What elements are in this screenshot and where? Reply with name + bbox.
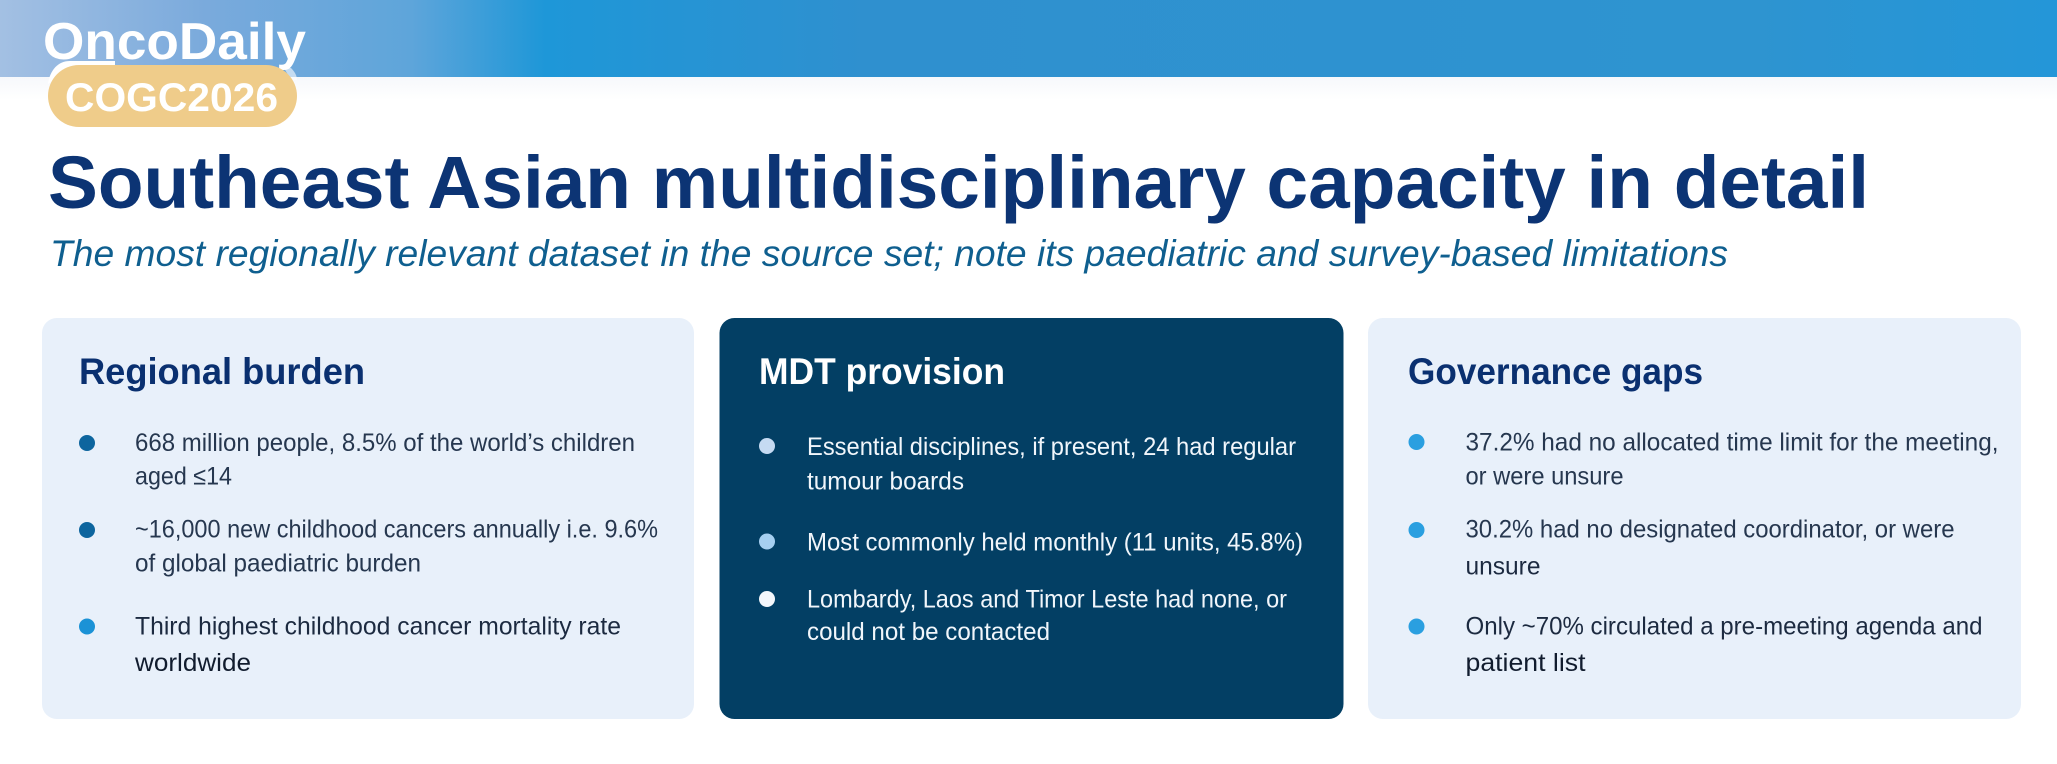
heading: governance gaps: Governance gaps [1408,351,1703,392]
bullet: coordinator: unsure [1466,552,1540,580]
bullet: time limit [1408,428,1998,490]
panel: regional burden [42,318,694,719]
heading: MDT provision: MDT provision [759,351,1005,392]
bullet: agenda: Only ~70% circulated a pre-meeting agenda and [1466,612,1982,640]
bullet: coordinator [1408,516,1954,580]
bullet: none: Lombardy, Laos and Timor Leste had none, or [807,586,1287,614]
bullet: none: could not be contacted [807,618,1050,646]
subtitle: The most regionally relevant dataset in the source set; note its paediatric and survey-based limitations [50,233,1728,274]
header band [0,0,2057,77]
logo: OncoDaily wordmark: OncoDaily [43,13,306,71]
bullet: population: aged ≤14 [135,462,232,490]
badge: COGC2026 [48,61,297,127]
bullet: new cancers [79,516,658,578]
bullet: mortality: Third highest childhood cancer mortality rate [135,612,621,640]
bullet: tumour boards: tumour boards [807,468,964,496]
bullet: time limit: or were unsure [1466,462,1624,490]
bullet: agenda [1408,612,1982,677]
panel: governance gaps [1368,318,2021,719]
bullet: population: 668 million people, 8.5% of the world’s children [135,429,635,457]
heading: regional burden: Regional burden [79,351,365,392]
bullet: tumour boards: Essential disciplines, if present, 24 had regular [807,433,1296,461]
bullet: coordinator: 30.2% had no designated coordinator, or were [1466,516,1954,544]
bullet: agenda: patient list [1466,649,1586,677]
bullet: new cancers: ~16,000 new childhood cancers annually i.e. 9.6% [135,516,658,544]
bullet: time limit: 37.2% had no allocated time limit for the meeting, [1466,428,1998,456]
bullet: population [79,429,635,490]
badge: COGC2026: COGC2026 [65,76,278,120]
bullet: monthly: Most commonly held monthly (11 units, 45.8%) [807,528,1303,556]
bullet: none [759,586,1287,646]
title: Southeast Asian multidisciplinary capacity in detail [48,141,1869,224]
bullet: new cancers: of global paediatric burden [135,550,421,578]
panel: MDT provision [720,318,1344,719]
bullet: mortality [79,612,621,677]
bullet: tumour boards [759,433,1296,496]
bullet: mortality: worldwide [134,649,251,677]
